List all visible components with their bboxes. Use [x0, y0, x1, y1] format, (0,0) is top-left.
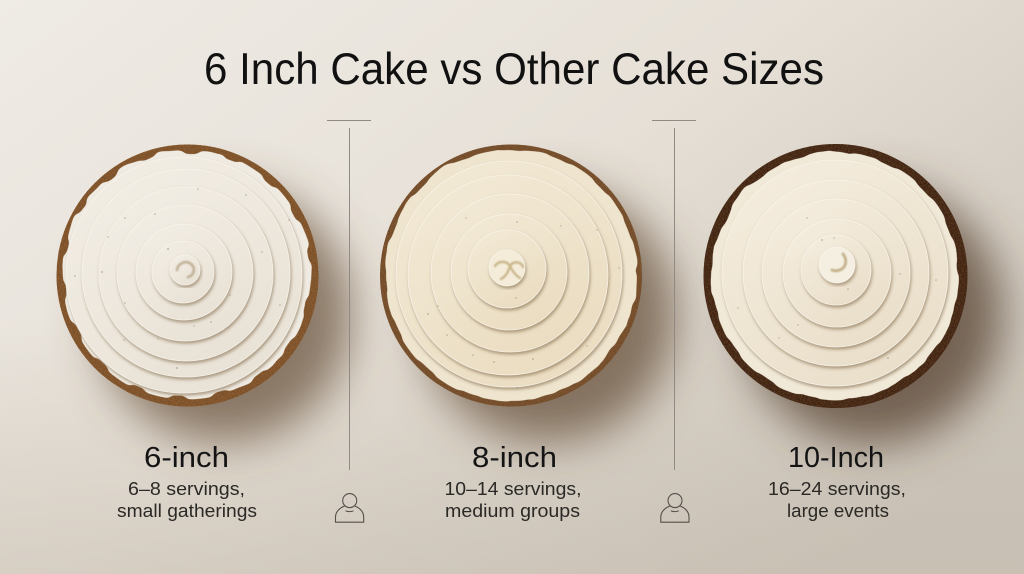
servings text: 6-inch: 6–8 servings, [128, 479, 245, 499]
label: 10-inch [768, 442, 906, 521]
frosting: 6-inch [65, 152, 309, 396]
cake: 6-inch [56, 144, 318, 406]
size heading: 10-inch: 10-Inch [788, 442, 884, 474]
label: 6-inch [117, 442, 257, 521]
speckles: 6-inch [74, 188, 290, 369]
swirl: 10-inch [832, 254, 846, 271]
servings text: 10-inch [768, 479, 906, 521]
cake: 8-inch [380, 144, 642, 406]
servings text: 8-inch [444, 479, 582, 521]
cake: 10-inch [704, 144, 968, 408]
servings text: 10-inch: 16–24 servings, [768, 479, 906, 499]
servings text: 10-inch: large events [787, 501, 889, 521]
crust: 8-inch [380, 144, 642, 406]
icon: person right [661, 494, 689, 522]
label: 8-inch [444, 442, 582, 521]
divider: left [327, 120, 371, 470]
crust: 10-inch [704, 144, 968, 408]
swirl: 6-inch [177, 262, 194, 277]
speckles: 8-inch [427, 217, 620, 389]
servings text: 8-inch: 10–14 servings, [444, 479, 582, 499]
swirl: 8-inch [495, 262, 523, 279]
shadows beneath cakes [96, 184, 1002, 444]
servings text: 6-inch: small gatherings [117, 501, 257, 521]
speckles: 10-inch [737, 217, 937, 359]
size heading: 6-inch: 6-inch [144, 442, 229, 474]
icon: person left [336, 494, 364, 522]
frosting: 10-inch [712, 153, 958, 399]
title: 6 Inch Cake vs Other Cake Sizes [204, 45, 824, 94]
size heading: 8-inch: 8-inch [472, 442, 557, 474]
frosting: 8-inch [386, 150, 636, 400]
servings text: 6-inch [117, 479, 257, 521]
servings text: 8-inch: medium groups [445, 501, 580, 521]
crust: 6-inch [56, 144, 318, 406]
divider: right [652, 120, 696, 470]
